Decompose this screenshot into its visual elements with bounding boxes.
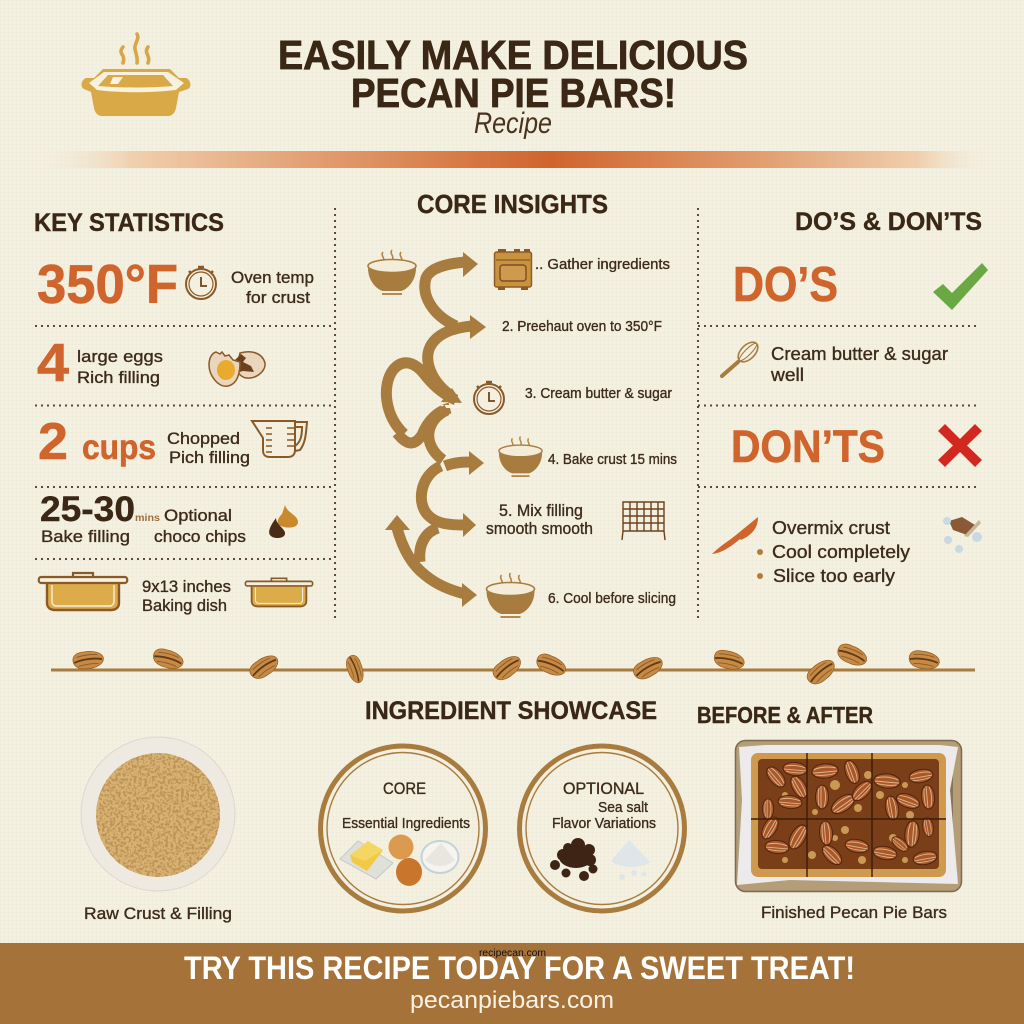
flow arrows [385, 252, 486, 607]
step 5 text [486, 501, 593, 538]
stat: 25-30 mins: Bake filling [41, 527, 130, 546]
text: don't items: Cool completely [772, 542, 910, 562]
stat: 25-30 mins: mins [135, 513, 160, 524]
title: PECAN PIE BARS! [351, 70, 676, 116]
heading: before and after: BEFORE & AFTER [697, 702, 873, 728]
icon: chocolate and salt [943, 517, 982, 553]
stat: 2 cups: Chopped [167, 429, 240, 448]
heading: key statistics: KEY STATISTICS [34, 209, 224, 237]
text: don't items: Overmix crust [772, 518, 890, 538]
stat: 4 large eggs: Rich filling [77, 368, 160, 387]
stat: 2 cups: 2 [38, 413, 68, 471]
footer banner [0, 943, 1024, 1024]
text: don't items [757, 518, 910, 586]
panel: do's and don'ts [712, 208, 988, 586]
watermark: recipecan.com [479, 948, 546, 959]
heading: do's and don'ts: DO’S & DON’TS [795, 208, 982, 236]
stat: 350F oven temp [37, 253, 314, 315]
stat: 350F oven temp: for crust [246, 288, 310, 307]
stat: 4 large eggs: 4 [37, 333, 69, 393]
icon: green check [933, 263, 988, 310]
step 6 with bowl: 6. Cool before slicing [548, 590, 676, 607]
icon: cooling rack [622, 502, 665, 540]
step 3 with stopwatch: 3. Cream butter & sugar [525, 385, 672, 402]
text: baking dish size [142, 577, 231, 615]
icon: knife [712, 517, 758, 554]
badge: optional ingredients [520, 746, 684, 911]
step 5 text: 5. Mix filling [499, 501, 583, 520]
icon: bowl [368, 250, 416, 294]
step 5 text: smooth smooth [486, 519, 593, 538]
stat: 4 large eggs: large eggs [77, 347, 163, 366]
step 3 with stopwatch [474, 382, 672, 414]
stat: 4 large eggs [37, 333, 163, 393]
panel: core insights [368, 189, 677, 617]
image: tray of finished bars [736, 740, 962, 892]
step 1 with oven icon: .. Gather ingredients [535, 256, 670, 273]
do's label: DO’S [733, 258, 838, 312]
stat: 2 cups [38, 413, 250, 471]
heading: ingredient showcase: INGREDIENT SHOWCASE [365, 697, 657, 725]
stat: 350F oven temp: 350°F [37, 253, 178, 315]
caption: raw crust: Raw Crust & Filling [84, 904, 232, 923]
stat: 2 cups: Pich filling [169, 448, 250, 467]
don'ts label: DON’TS [731, 421, 885, 472]
text: do item: Cream butter & sugar [771, 344, 948, 364]
icon: sea salt [611, 840, 650, 880]
step 4 with bowl [499, 436, 677, 476]
panel: key statistics [34, 209, 314, 615]
icon: flour bowl [422, 841, 458, 873]
badge: core ingredients: CORE [383, 779, 426, 798]
badge: optional ingredients: Sea salt [598, 799, 649, 816]
icon: cracked egg [209, 352, 265, 386]
icon: measuring cup [252, 421, 307, 457]
badge: core ingredients: Essential Ingredients [342, 815, 470, 832]
step 1 with oven icon [494, 249, 670, 290]
pecan divider [51, 641, 975, 688]
icon: red cross [938, 424, 982, 467]
text: do item [770, 344, 948, 385]
title [278, 32, 748, 116]
gradient divider bar [40, 151, 985, 168]
icon: baking dish small [245, 578, 313, 606]
icon: chocolate pile [550, 838, 598, 881]
footer url: pecanpiebars.com [410, 987, 614, 1014]
step 6 with bowl [486, 573, 676, 617]
title: EASILY MAKE DELICIOUS [278, 32, 748, 78]
text: don't items: Slice too early [773, 566, 895, 586]
image: bowl of raw crust [81, 737, 235, 891]
step 4 with bowl: 4. Bake crust 15 mins [548, 451, 677, 468]
column dividers [35, 208, 978, 622]
caption: finished bars: Finished Pecan Pie Bars [761, 903, 947, 922]
badge: optional ingredients: Flavor Variations [552, 815, 656, 832]
stat: 350F oven temp: Oven temp [231, 268, 314, 287]
text: do item: well [770, 365, 804, 385]
stat: 25-30 mins: 25-30 [40, 490, 135, 529]
subtitle: Recipe: Recipe [474, 107, 552, 140]
icon: chocolate chips [269, 505, 298, 538]
heading: core insights: CORE INSIGHTS [417, 189, 608, 219]
stat: 25-30 mins: Optional [164, 506, 232, 525]
step 2: 2. Preehaut oven to 350°F [502, 318, 662, 335]
badge: core ingredients [320, 746, 486, 911]
badge: optional ingredients: OPTIONAL [563, 779, 644, 798]
icon: whisk [722, 339, 761, 376]
text: baking dish size: Baking dish [142, 596, 227, 615]
icon: butter on dish [340, 841, 393, 879]
icon: eggs [388, 834, 422, 886]
icon: baking dish large [39, 573, 127, 610]
stat: 25-30 mins: choco chips [154, 527, 246, 546]
footer headline: TRY THIS RECIPE TODAY FOR A SWEET TREAT! [184, 950, 855, 986]
icon: steaming baking dish [82, 34, 190, 116]
stat: 25-30 mins [40, 490, 246, 546]
text: baking dish size: 9x13 inches [142, 577, 231, 596]
stat: 2 cups: cups [82, 428, 156, 467]
